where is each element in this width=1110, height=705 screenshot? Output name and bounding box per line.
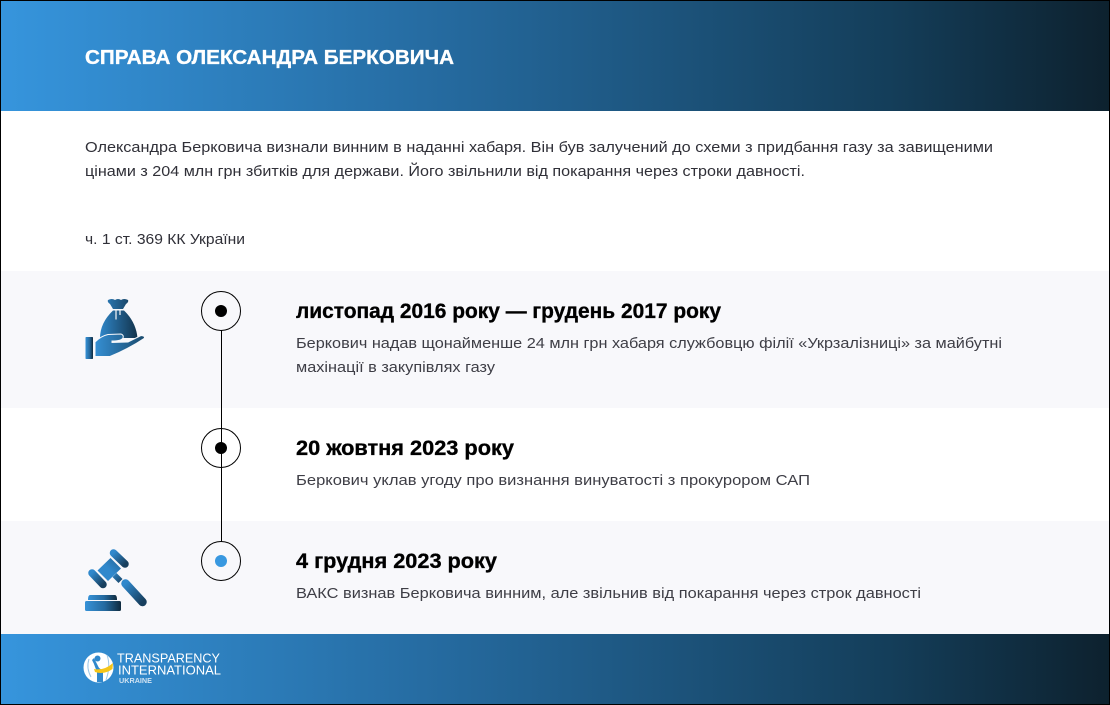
- footer banner: [0, 634, 1110, 705]
- panel: row 3 background: [0, 521, 1110, 634]
- panel: row 1 background: [0, 271, 1110, 408]
- summary text: цінами з 204 млн грн збитків для держави. Його звільнили від покарання через строки давності.: [85, 162, 805, 180]
- legal article reference: ч. 1 ст. 369 КК України: [85, 232, 245, 248]
- header banner: [0, 0, 1110, 111]
- logo: Transparency International Ukraine: TRANSPARENCY: [117, 650, 220, 666]
- timeline marker 3: [202, 542, 240, 580]
- summary text: Олександра Берковича визнали винним в наданні хабаря. Він був залучений до схеми з придбання газу за завищеними: [85, 140, 993, 156]
- logo: Transparency International Ukraine: INTERNATIONAL: [118, 662, 221, 678]
- description: event 1: [296, 336, 1002, 376]
- description: event 1: Беркович надав щонайменше 24 млн грн хабаря службовцю філії «Укрзалізниці» за майбутні: [296, 336, 1002, 352]
- heading: event 2: 20 жовтня 2023 року: [296, 437, 514, 460]
- heading: event 3: 4 грудня 2023 року: [296, 550, 497, 573]
- icon: money bag in hand: [86, 299, 145, 359]
- description: event 3: ВАКС визнав Берковича винним, але звільнив від покарання через строк давності: [296, 586, 921, 602]
- description: event 2: Беркович уклав угоду про визнання винуватості з прокурором САП: [296, 473, 810, 489]
- timeline marker 1: [202, 292, 240, 330]
- heading: event 1: листопад 2016 року — грудень 2017 року: [296, 300, 721, 323]
- summary text: [85, 140, 993, 180]
- timeline marker 2: [202, 428, 240, 468]
- title: СПРАВА ОЛЕКСАНДРА БЕРКОВИЧА: [85, 47, 454, 69]
- icon: judge gavel: [85, 553, 142, 611]
- timeline connector: [220, 330, 222, 542]
- logo: Transparency International Ukraine: UKRAINE: [119, 678, 152, 685]
- logo: Transparency International Ukraine: [84, 650, 221, 685]
- description: event 1: махінації в закупівлях газу: [296, 360, 496, 376]
